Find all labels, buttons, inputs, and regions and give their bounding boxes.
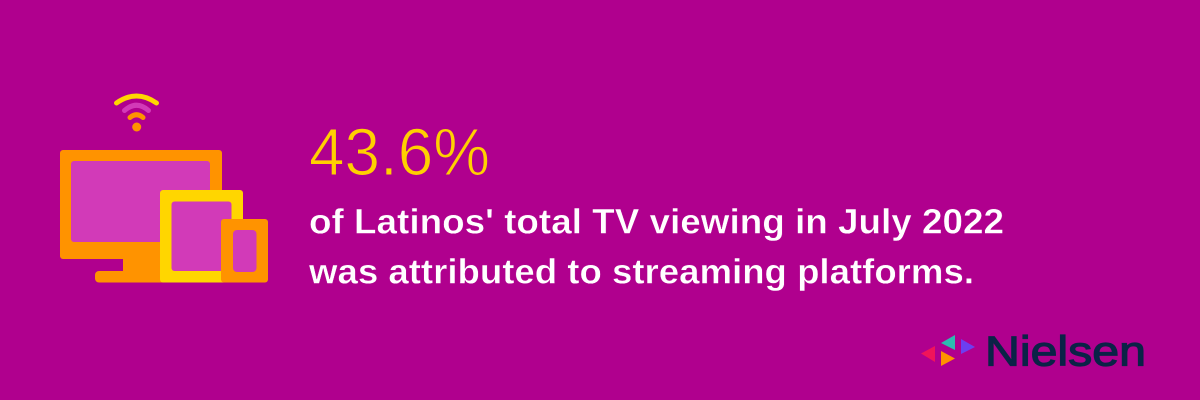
logo wordmark: Nielsen [985,328,1146,374]
icon: phone [221,219,268,282]
headline statistic: 43.6% [309,115,490,190]
description text: was attributed to streaming platforms. [308,252,974,292]
description text: of Latinos' total TV viewing in July 2022 [309,202,1004,242]
icon: tablet [160,190,243,282]
icon: logo triangles [921,335,975,366]
description text [308,202,1004,292]
icon: TV monitor [60,150,222,282]
icon: wifi signal [116,96,156,132]
Nielsen logo [921,328,1146,374]
